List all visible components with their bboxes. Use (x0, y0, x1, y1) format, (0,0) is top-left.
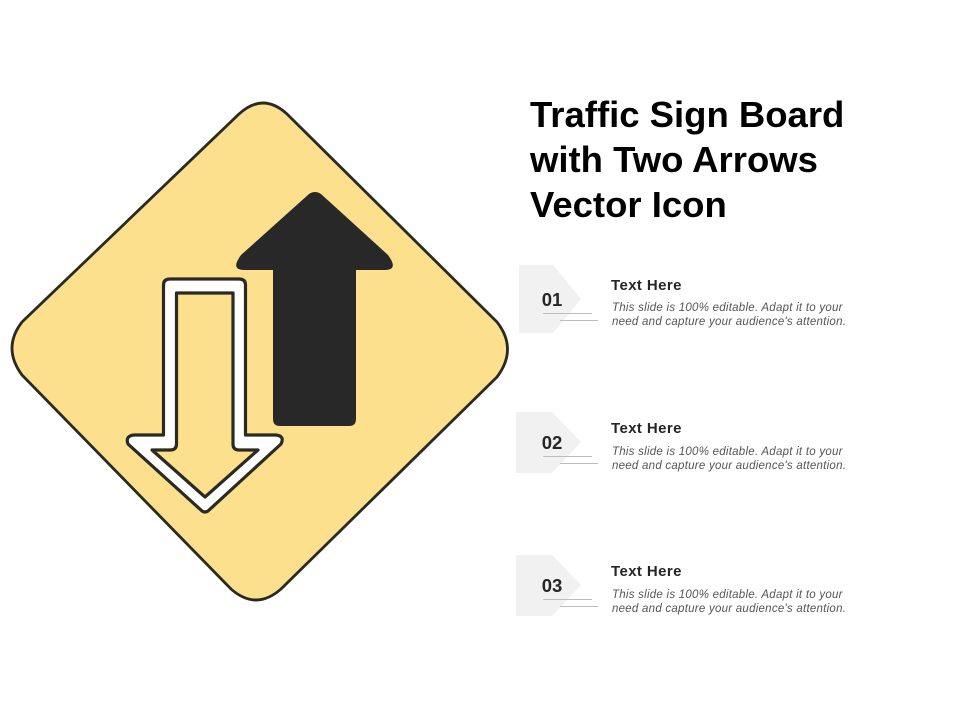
number 02: 02 (542, 432, 562, 453)
item 01 (519, 265, 846, 333)
icon: traffic sign board (10, 102, 509, 602)
number 01: 01 (542, 289, 562, 310)
icon: solid up arrow (236, 192, 393, 426)
description 03 (612, 588, 846, 615)
description 01 (612, 302, 846, 328)
description 02: need and capture your audience's attention. (612, 460, 846, 472)
item 02 (516, 412, 846, 473)
description 02: This slide is 100% editable. Adapt it to your (612, 446, 843, 458)
diamond sign (12, 103, 508, 600)
number tag 01 (519, 265, 598, 333)
title: Traffic Sign Board (530, 94, 844, 135)
description 03: need and capture your audience's attention. (612, 603, 846, 615)
heading 02: Text Here (611, 420, 682, 437)
title (530, 94, 844, 225)
heading 03: Text Here (611, 563, 682, 580)
number tag 03 (516, 555, 598, 616)
number 03: 03 (542, 575, 562, 596)
title: with Two Arrows (530, 139, 818, 180)
description 02 (612, 446, 846, 472)
description 03: This slide is 100% editable. Adapt it to your (612, 588, 843, 600)
icon: outlined down arrow (127, 279, 282, 512)
description 01: This slide is 100% editable. Adapt it to your (612, 302, 843, 314)
number tag 02 (516, 412, 598, 473)
title: Vector Icon (530, 184, 727, 225)
heading 01: Text Here (611, 277, 682, 294)
item 03 (516, 555, 846, 616)
description 01: need and capture your audience's attention. (612, 316, 846, 328)
